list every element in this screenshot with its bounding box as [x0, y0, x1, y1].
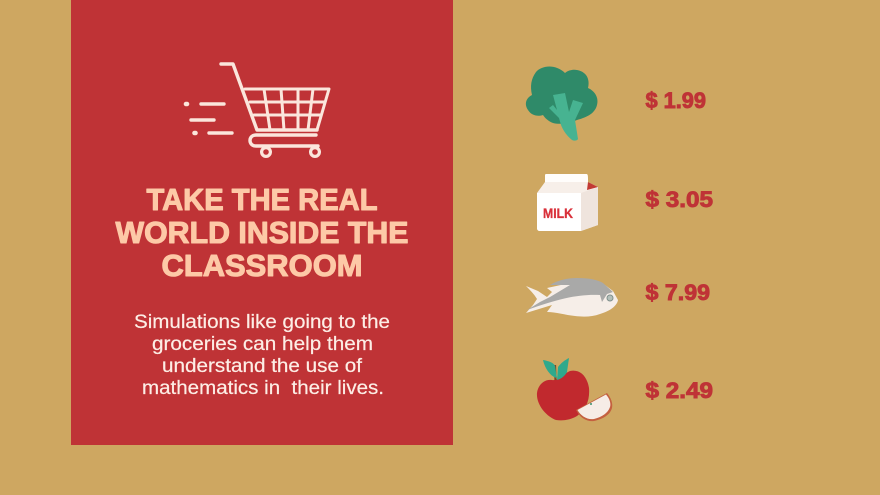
heading [116, 182, 408, 283]
body text: mathematics in their lives. [142, 378, 384, 399]
icon: milk carton [537, 174, 598, 231]
icon: fish [526, 278, 618, 317]
price: milk: $ 3.05 [646, 187, 713, 212]
price: broccoli: $ 1.99 [646, 88, 706, 113]
body text: groceries can help them [152, 334, 373, 355]
heading: CLASSROOM [162, 248, 362, 283]
panel: red message panel [71, 0, 453, 445]
price: apple: $ 2.49 [646, 378, 713, 403]
price: fish: $ 7.99 [646, 280, 710, 305]
milk label: MILK [543, 205, 573, 221]
body text: Simulations like going to the [134, 312, 390, 333]
icon: shopping cart [186, 64, 329, 156]
body text [134, 312, 390, 399]
heading: TAKE THE REAL [146, 182, 378, 217]
heading: WORLD INSIDE THE [116, 215, 408, 250]
icon: apple [537, 358, 612, 421]
icon: broccoli [526, 66, 598, 141]
body text: understand the use of [162, 356, 363, 377]
